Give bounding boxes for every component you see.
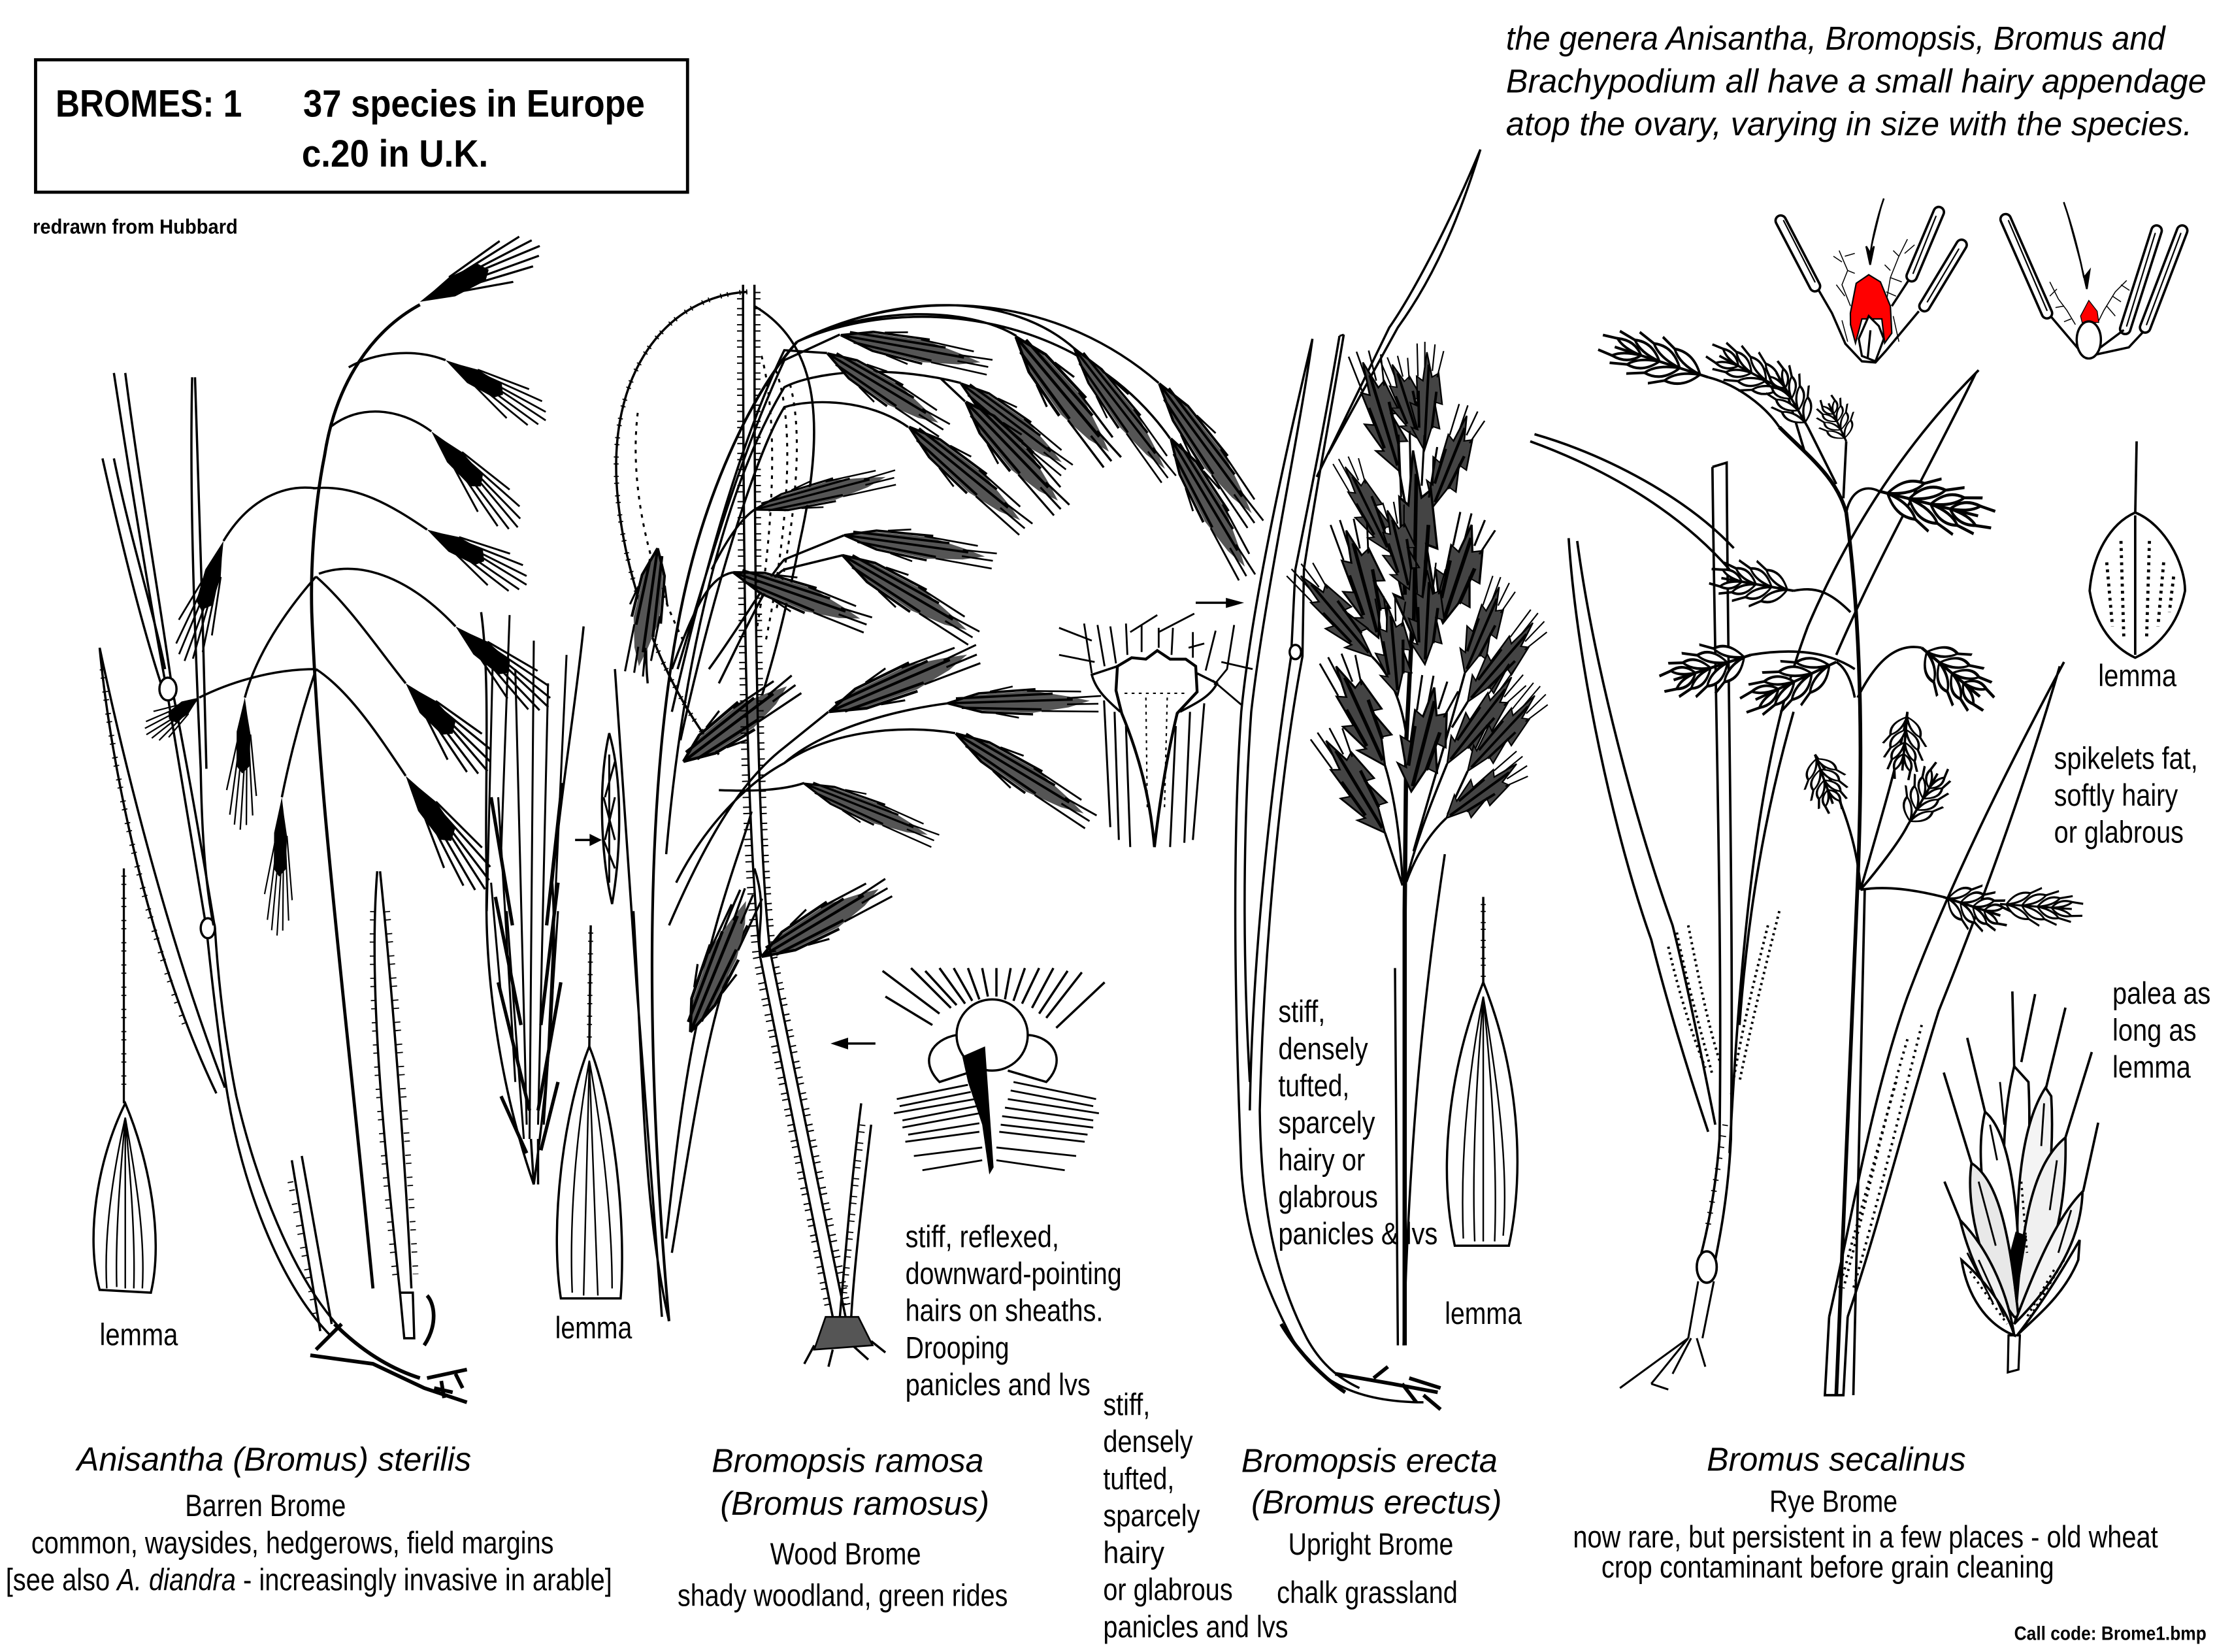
hairy stem: [740, 285, 848, 1317]
credit note: redrawn from Hubbard: [33, 214, 238, 238]
title box: [35, 59, 687, 192]
arrow: [1866, 199, 1884, 265]
note: palea: [2112, 976, 2210, 1084]
caption: Bromus secalinus: Rye Brome: [1769, 1485, 1897, 1519]
note: erecta traits: tufted,: [1278, 1068, 1349, 1102]
title box: c.20 in U.K.: [302, 133, 488, 175]
caption: Bromopsis erecta: Bromopsis erecta: [1241, 1442, 1498, 1479]
caption: Bromopsis ramosa: Wood Brome: [770, 1537, 921, 1571]
top-right italic note: [1506, 20, 2207, 142]
note: stiff densely tufted: stiff,: [1103, 1387, 1150, 1421]
anthers: [2006, 219, 2182, 329]
arrow to ligule: [1196, 599, 1240, 606]
top-right italic note: the genera Anisantha, Bromopsis, Bromus and: [1506, 20, 2166, 57]
arrow: [2063, 202, 2090, 289]
note: ramosa traits: panicles and lvs: [906, 1368, 1091, 1402]
anthers: [1781, 212, 1961, 306]
caption: Bromopsis ramosa: (Bromus ramosus): [720, 1485, 989, 1522]
lemma: [2090, 441, 2185, 657]
plant: Bromus secalinus: [1530, 319, 2185, 1395]
ligule detail: [883, 968, 1105, 1174]
culm 2 and roots: [1620, 463, 1731, 1389]
caption: Bromopsis ramosa: Bromopsis ramosa: [712, 1442, 983, 1479]
filaments and hairs: [2050, 280, 2144, 359]
note: stiff densely tufted: panicles and lvs: [1103, 1610, 1288, 1644]
lemma: [1447, 897, 1517, 1246]
caption: Bromus secalinus: [1573, 1440, 2158, 1584]
note: ramosa traits: Drooping: [906, 1330, 1009, 1364]
base and lower leaf: [804, 1103, 885, 1366]
caption: Bromopsis ramosa: shady woodland, green rides: [678, 1578, 1008, 1612]
spikelets: [619, 320, 1273, 1040]
palea figure: [1944, 991, 2098, 1372]
branches: [615, 305, 1170, 1321]
red ovary appendage: [1850, 274, 1892, 343]
label: lemma: lemma: [555, 1311, 632, 1345]
caption: Anisantha sterilis: Barren Brome: [185, 1489, 346, 1523]
note: palea: palea as: [2112, 976, 2210, 1010]
culm and leaves: [1236, 150, 1481, 1410]
lemma: [93, 868, 156, 1293]
label: lemma: lemma: [1445, 1297, 1522, 1330]
note: stiff densely tufted: sparcely: [1103, 1498, 1200, 1532]
ovary diagram: large appendage: [1781, 199, 1961, 363]
note: ramosa traits: hairs on sheaths.: [906, 1294, 1103, 1328]
note: erecta traits: [1278, 995, 1437, 1251]
note: ramosa traits: [906, 1219, 1122, 1402]
main culm and branches: [1708, 377, 1943, 1395]
note: spikelets: spikelets fat,: [2054, 741, 2198, 775]
note: erecta traits: glabrous: [1278, 1180, 1378, 1214]
caption: Bromus secalinus: Bromus secalinus: [1707, 1440, 1966, 1478]
caption: Anisantha sterilis: Anisantha (Bromus) sterilis: [75, 1440, 471, 1478]
caption: Anisantha sterilis: common, waysides, hedgerows, field margins: [31, 1526, 553, 1560]
panicle axis and branches: [199, 305, 455, 1289]
caption: Bromopsis erecta: (Bromus erectus): [1251, 1483, 1502, 1521]
caption: Anisantha sterilis: [6, 1440, 612, 1596]
plant: Bromopsis erecta: [1059, 150, 1554, 1410]
note: erecta traits: hairy or: [1278, 1143, 1365, 1177]
title box: BROMES: 1: [56, 83, 242, 125]
plant: Bromopsis ramosa: [615, 285, 1273, 1366]
lemma 2: [557, 733, 622, 1298]
ligule detail: [1059, 614, 1253, 847]
note: erecta traits: panicles & lvs: [1278, 1217, 1437, 1251]
note: ramosa traits: downward-pointing: [906, 1257, 1122, 1291]
note: spikelets: or glabrous: [2054, 816, 2184, 850]
note: palea: lemma: [2112, 1050, 2191, 1084]
note: stiff densely tufted: [1103, 1387, 1288, 1644]
caption: Bromopsis erecta: chalk grassland: [1277, 1576, 1458, 1610]
filaments and hairs: [1819, 239, 1919, 363]
panicle: [1282, 341, 1554, 1346]
label: lemma: lemma: [2098, 659, 2177, 693]
caption: Bromopsis erecta: [1241, 1442, 1502, 1610]
note: ramosa traits: stiff, reflexed,: [906, 1219, 1059, 1253]
caption: Bromopsis ramosa: [678, 1442, 1008, 1612]
note: palea: long as: [2112, 1014, 2197, 1048]
arrow to ligule: [834, 1039, 876, 1048]
title box: 37 species in Europe: [303, 83, 645, 125]
caption: Anisantha sterilis: [see also A. diandra - increasingly invasive in arable]: [6, 1562, 612, 1596]
note: erecta traits: sparcely: [1278, 1106, 1375, 1140]
top-right italic note: Brachypodium all have a small hairy appendage: [1506, 63, 2207, 100]
note: spikelets: softly hairy: [2054, 778, 2178, 812]
small arrow: [575, 836, 599, 844]
note: spikelets: [2054, 741, 2198, 850]
spikelets: [138, 227, 562, 936]
leaves: [1530, 370, 2064, 1395]
detached spikelet: [481, 612, 583, 1185]
caption: Bromopsis erecta: Upright Brome: [1288, 1527, 1453, 1561]
spikelets: [1593, 319, 2084, 940]
ovary: [2076, 322, 2101, 359]
note: erecta traits: densely: [1278, 1032, 1368, 1066]
ovary: [1859, 316, 1884, 361]
plant: Anisantha sterilis: [93, 227, 622, 1402]
note: stiff densely tufted: densely: [1103, 1425, 1193, 1459]
call code: Call code: Brome1.bmp: [2014, 1623, 2207, 1645]
caption: Bromus secalinus: crop contaminant before grain cleaning: [1601, 1550, 2054, 1584]
note: stiff densely tufted: hairy: [1103, 1536, 1165, 1570]
label: lemma: lemma: [99, 1318, 178, 1352]
leaf blade behind panicle: [616, 292, 814, 755]
top-right italic note: atop the ovary, varying in size with the species.: [1506, 105, 2192, 142]
culm and leaves: [99, 373, 467, 1402]
ovary diagram: small appendage: [2006, 202, 2182, 359]
note: stiff densely tufted: or glabrous: [1103, 1573, 1233, 1607]
note: stiff densely tufted: tufted,: [1103, 1462, 1174, 1496]
note: erecta traits: stiff,: [1278, 995, 1325, 1029]
red ovary appendage: [2080, 301, 2099, 322]
